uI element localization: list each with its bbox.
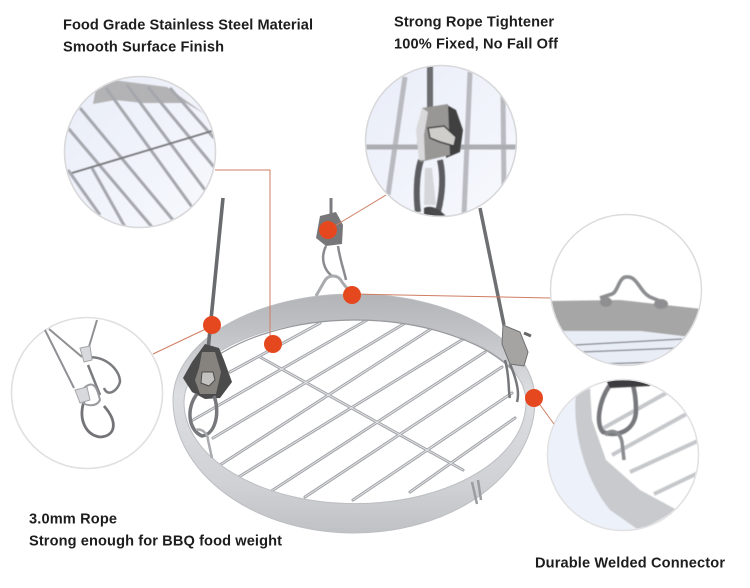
- heading: rope tightener: 100% Fixed, No Fall Off: [394, 36, 558, 52]
- callout circle: rope and thimble: [12, 318, 162, 468]
- clamp body: [417, 104, 450, 162]
- rope: top clamp, loop and connector: [316, 198, 350, 296]
- left rope line: [208, 198, 223, 350]
- grill bars: [193, 320, 515, 500]
- rope loop legs: [417, 160, 442, 212]
- callout circle: welded connector: [547, 379, 700, 531]
- heading: rope strength: [29, 512, 282, 550]
- clamp end: [606, 380, 650, 388]
- left shackle: [196, 430, 212, 458]
- band: [550, 300, 702, 337]
- clamp side: [416, 108, 428, 160]
- welded hook: [316, 276, 350, 296]
- left clamp: [183, 344, 232, 399]
- wire loop: [599, 382, 636, 434]
- marker dots: [203, 221, 543, 407]
- heading: food grade material: [63, 18, 313, 56]
- hook wire: [600, 277, 665, 303]
- circle outline: [550, 214, 702, 366]
- grate bars: [600, 392, 700, 494]
- tightener detail: [365, 65, 517, 217]
- callout circle: welded hook: [550, 214, 702, 366]
- right wire loop: [505, 360, 518, 402]
- left clamp plate: [195, 352, 221, 394]
- callout circle: grill surface: [64, 76, 216, 228]
- upper rope: [427, 65, 433, 108]
- heading: welded connector: Durable Welded Connector: [535, 556, 725, 572]
- top rope line: [330, 198, 332, 216]
- stainless ring: [173, 294, 535, 533]
- circle outline: [64, 76, 216, 228]
- heading: food grade material: Food Grade Stainless Steel Material: [63, 18, 313, 34]
- circle outline: [366, 66, 516, 216]
- lower grate: [564, 331, 684, 365]
- clamp nut: [201, 372, 215, 386]
- right clamp: [502, 325, 528, 366]
- rope loop detail: [45, 320, 120, 437]
- grill surface detail: [64, 76, 216, 228]
- ring band: [575, 388, 677, 531]
- weld points: [600, 297, 612, 307]
- heading: rope tightener: Strong Rope Tightener: [394, 14, 554, 30]
- clamp back: [446, 105, 463, 158]
- top wire loop: [323, 246, 346, 280]
- rope: left with clamp and loop: [183, 198, 232, 458]
- clamp bolt: [428, 126, 456, 146]
- hook detail: [552, 274, 698, 365]
- inner ring edge: [197, 320, 514, 372]
- panel: grill grate with ring: [173, 294, 535, 533]
- top clamp: [316, 212, 343, 246]
- left wire loop: [190, 394, 217, 436]
- weld mark: [472, 480, 481, 504]
- right clamp bolt: [524, 333, 531, 336]
- heading: rope tightener: [394, 14, 558, 52]
- circle outline: [548, 380, 698, 530]
- rope: right with clamp: [480, 208, 531, 402]
- callout circle: rope tightener: [365, 65, 517, 217]
- thimble bottom: [424, 207, 446, 216]
- right rope line: [480, 208, 504, 325]
- heading: food grade material: Smooth Surface Finish: [63, 40, 224, 56]
- leader lines: [153, 170, 554, 424]
- heading: rope strength: Strong enough for BBQ food weight: [29, 534, 282, 550]
- connector detail: [547, 379, 700, 531]
- heading: rope strength: 3.0mm Rope: [29, 512, 117, 528]
